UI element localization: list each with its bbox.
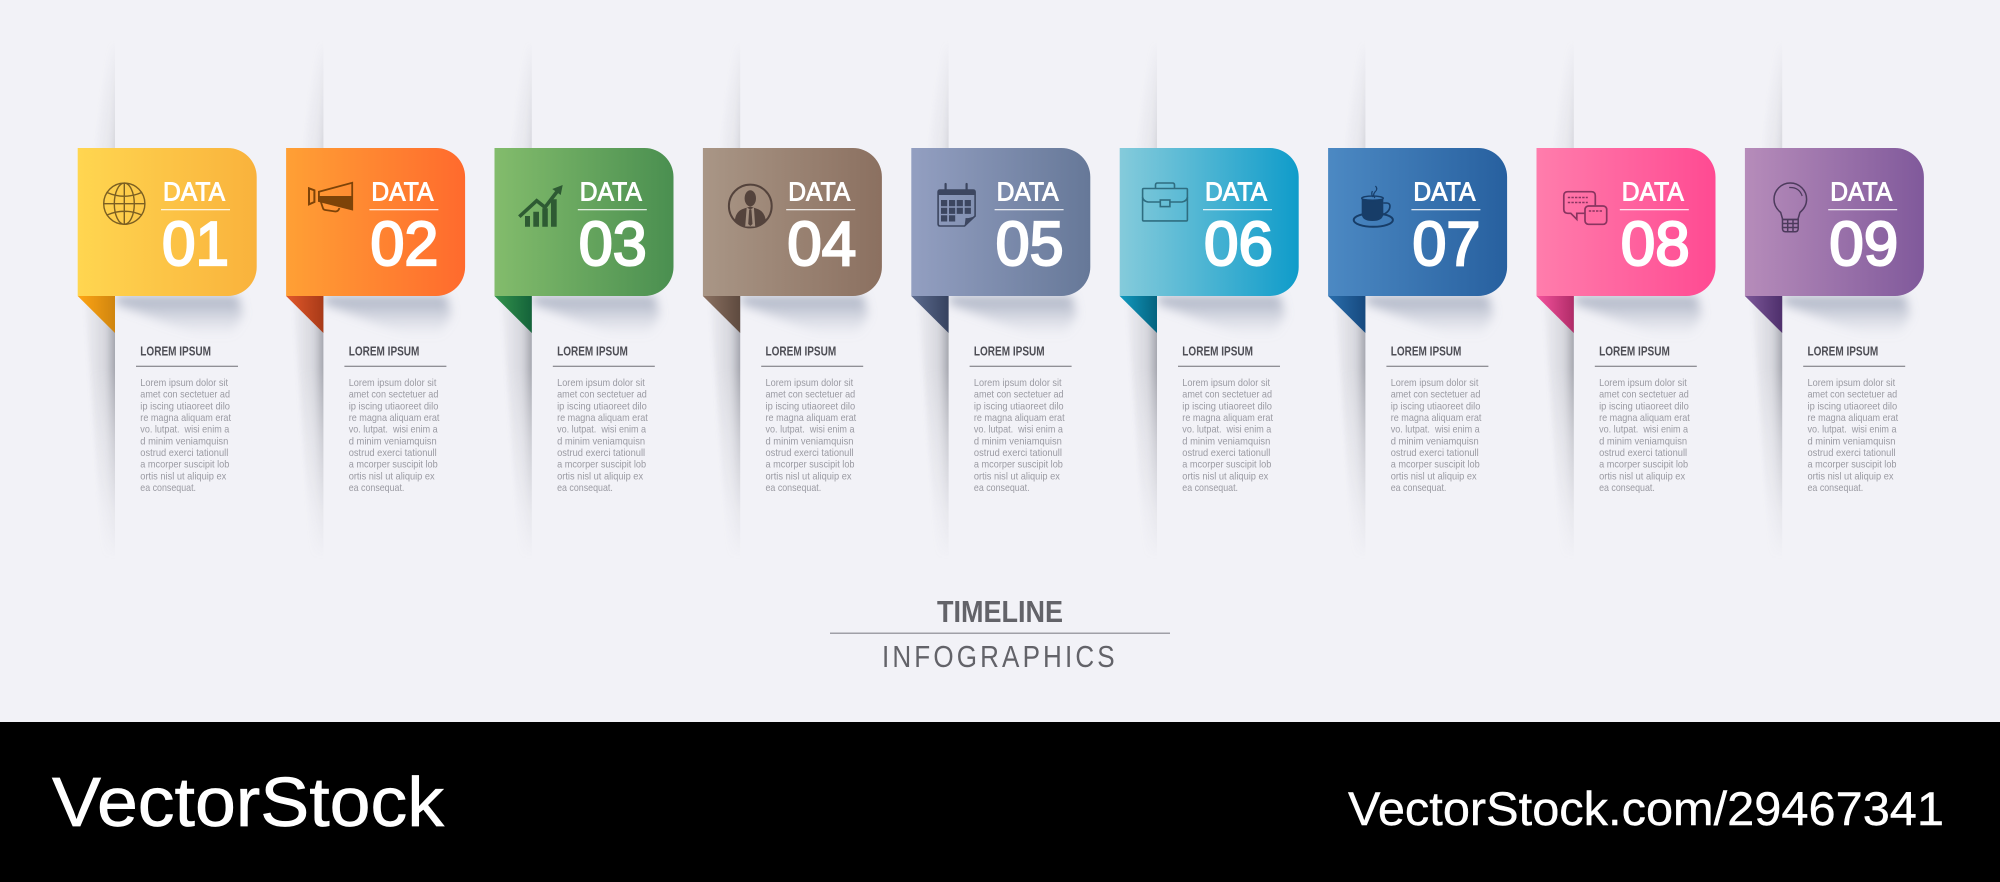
text block: re magna aliquam erat [1182, 412, 1273, 424]
text block: a mcorper suscipit lob [140, 459, 229, 471]
text block: ea consequat. [1807, 482, 1863, 494]
card [494, 148, 674, 296]
text block: LOREM IPSUM [1391, 345, 1461, 359]
label: DATA 09: DATA [1830, 177, 1893, 207]
card [1536, 148, 1716, 296]
label: DATA 02: 02 [370, 210, 438, 279]
label: DATA 05: 05 [996, 210, 1064, 279]
text block: ostrud exerci tationull [1599, 447, 1687, 459]
text block: d minim veniamquisn [1599, 435, 1687, 447]
text block: ortis nisl ut aliquip ex [1599, 470, 1686, 482]
text block: d minim veniamquisn [140, 435, 228, 447]
text block: ortis nisl ut aliquip ex [557, 470, 644, 482]
text block [1386, 345, 1488, 494]
label: DATA 07 [1411, 177, 1480, 279]
panel: step 07 [1328, 36, 1507, 570]
image URL: VectorStock.com/29467341 [1348, 782, 1944, 835]
text block: ostrud exerci tationull [766, 447, 854, 459]
text block: amet con sectetuer ad [1182, 389, 1272, 401]
label: DATA 06: 06 [1204, 210, 1273, 279]
label: DATA 09: 09 [1829, 210, 1898, 279]
text block: d minim veniamquisn [557, 435, 645, 447]
text block: re magna aliquam erat [766, 412, 856, 424]
text block: a mcorper suscipit lob [349, 459, 438, 471]
icon: coffee cup [1354, 186, 1393, 227]
text block: d minim veniamquisn [349, 435, 437, 447]
text block: LOREM IPSUM [1599, 345, 1670, 359]
text block: LOREM IPSUM [766, 345, 836, 359]
label: DATA 02 [369, 177, 438, 279]
brand name: VectorStock [52, 763, 445, 841]
text block: ea consequat. [557, 482, 613, 494]
text block: a mcorper suscipit lob [1182, 459, 1271, 471]
fold [911, 296, 949, 333]
text block: amet con sectetuer ad [974, 389, 1064, 401]
icon: briefcase [1143, 183, 1187, 221]
text block [970, 345, 1072, 494]
text block: re magna aliquam erat [1599, 412, 1690, 424]
text block: LOREM IPSUM [140, 345, 211, 359]
text block: ortis nisl ut aliquip ex [1182, 470, 1269, 482]
text block: vo. lutpat. wisi enim a [1182, 424, 1271, 436]
fold [1536, 296, 1574, 333]
text block: ea consequat. [1599, 482, 1655, 494]
text block: a mcorper suscipit lob [766, 459, 855, 471]
label: DATA 03: 03 [579, 210, 647, 279]
label: DATA 03 [578, 177, 647, 279]
icon: globe [104, 183, 145, 224]
text block: Lorem ipsum dolor sit [1807, 377, 1895, 389]
text block: vo. lutpat. wisi enim a [1391, 424, 1480, 436]
text block: vo. lutpat. wisi enim a [974, 424, 1063, 436]
text block: re magna aliquam erat [140, 412, 231, 424]
text block: ortis nisl ut aliquip ex [140, 470, 227, 482]
label: DATA 01: 01 [162, 210, 229, 279]
text block: amet con sectetuer ad [766, 389, 855, 401]
text block: amet con sectetuer ad [1391, 389, 1481, 401]
text block: Lorem ipsum dolor sit [349, 377, 436, 389]
fold [286, 296, 323, 333]
text block: vo. lutpat. wisi enim a [557, 424, 646, 436]
text block: ea consequat. [1391, 482, 1446, 494]
label: DATA 04: 04 [787, 210, 856, 279]
card [1745, 148, 1924, 296]
text block: re magna aliquam erat [557, 412, 648, 424]
panel: step 02 [286, 36, 465, 570]
text block: ip iscing utiaoreet dilo [557, 400, 647, 412]
text block: re magna aliquam erat [1391, 412, 1481, 424]
text block: amet con sectetuer ad [1807, 389, 1897, 401]
text block: a mcorper suscipit lob [974, 459, 1063, 471]
text block: d minim veniamquisn [766, 435, 854, 447]
text block: re magna aliquam erat [1807, 412, 1898, 424]
text block: Lorem ipsum dolor sit [140, 377, 228, 389]
text block: LOREM IPSUM [1807, 345, 1878, 359]
text block: vo. lutpat. wisi enim a [349, 424, 438, 436]
label: DATA 08: 08 [1621, 210, 1690, 279]
text block: ostrud exerci tationull [349, 447, 437, 459]
text block: vo. lutpat. wisi enim a [1807, 424, 1897, 436]
text block: ip iscing utiaoreet dilo [1182, 400, 1272, 412]
label: DATA 08: DATA [1622, 177, 1684, 207]
text block: Lorem ipsum dolor sit [557, 377, 645, 389]
fold [494, 296, 532, 333]
icon: megaphone [309, 183, 352, 212]
text block: vo. lutpat. wisi enim a [1599, 424, 1688, 436]
text block: ostrud exerci tationull [974, 447, 1062, 459]
text block: d minim veniamquisn [1807, 435, 1896, 447]
text block: a mcorper suscipit lob [1391, 459, 1480, 471]
fold [78, 296, 115, 333]
text block [553, 345, 655, 494]
text block: a mcorper suscipit lob [557, 459, 646, 471]
text block: ip iscing utiaoreet dilo [974, 400, 1064, 412]
text block: ip iscing utiaoreet dilo [1391, 400, 1481, 412]
text block: d minim veniamquisn [974, 435, 1062, 447]
text block: ip iscing utiaoreet dilo [766, 400, 855, 412]
text block [1595, 345, 1697, 494]
text block: LOREM IPSUM [1182, 345, 1253, 359]
icon: light bulb [1774, 183, 1807, 232]
label: DATA 06: DATA [1205, 177, 1268, 207]
icon: businessman [729, 185, 772, 227]
text block: ip iscing utiaoreet dilo [1807, 400, 1897, 412]
label: DATA 07: 07 [1412, 210, 1480, 279]
text block: ip iscing utiaoreet dilo [349, 400, 439, 412]
text block [761, 345, 863, 494]
text block: ostrud exerci tationull [1807, 447, 1895, 459]
text block: ea consequat. [1182, 482, 1238, 494]
panel: step 01 [78, 36, 257, 570]
text block: ortis nisl ut aliquip ex [349, 470, 435, 482]
label: DATA 08 [1620, 177, 1690, 279]
text block: ea consequat. [974, 482, 1030, 494]
label: DATA 04: DATA [788, 177, 851, 207]
panel: step 09 [1745, 36, 1924, 570]
text block [136, 345, 238, 494]
footer band [0, 722, 2000, 882]
text block: a mcorper suscipit lob [1807, 459, 1897, 471]
text block [1178, 345, 1280, 494]
text block: vo. lutpat. wisi enim a [766, 424, 855, 436]
text block: ea consequat. [349, 482, 404, 494]
panel: step 03 [494, 36, 674, 570]
text block: d minim veniamquisn [1391, 435, 1479, 447]
icon: chat bubbles [1564, 192, 1607, 224]
label: DATA 01 [161, 177, 230, 279]
label: DATA 09 [1828, 177, 1898, 279]
text block: ostrud exerci tationull [1182, 447, 1270, 459]
card [1120, 148, 1299, 296]
text block: amet con sectetuer ad [1599, 389, 1689, 401]
label: DATA 02: DATA [371, 177, 434, 207]
label: DATA 07: DATA [1413, 177, 1476, 207]
text block: ip iscing utiaoreet dilo [1599, 400, 1689, 412]
text block: ostrud exerci tationull [1391, 447, 1479, 459]
text block: ea consequat. [766, 482, 821, 494]
text block: LOREM IPSUM [557, 345, 628, 359]
card [911, 148, 1090, 296]
card [1328, 148, 1507, 296]
text block: Lorem ipsum dolor sit [1182, 377, 1270, 389]
text block [1803, 345, 1905, 494]
label: DATA 03: DATA [580, 177, 642, 207]
text block: ip iscing utiaoreet dilo [140, 400, 230, 412]
icon: growth chart [519, 185, 563, 227]
text block: ortis nisl ut aliquip ex [1807, 470, 1894, 482]
text block: amet con sectetuer ad [557, 389, 647, 401]
fold [1120, 296, 1157, 333]
panel: step 08 [1536, 36, 1716, 570]
text block: re magna aliquam erat [349, 412, 439, 424]
text block: LOREM IPSUM [974, 345, 1045, 359]
text block: ostrud exerci tationull [557, 447, 645, 459]
icon: calendar [938, 184, 975, 226]
text block: Lorem ipsum dolor sit [1599, 377, 1687, 389]
title: Timeline Infographics [830, 594, 1170, 675]
fold [1328, 296, 1365, 333]
text block: amet con sectetuer ad [349, 389, 439, 401]
text block: re magna aliquam erat [974, 412, 1065, 424]
text block: ostrud exerci tationull [140, 447, 228, 459]
label: DATA 04 [786, 177, 856, 279]
text block: Lorem ipsum dolor sit [766, 377, 853, 389]
label: DATA 05 [995, 177, 1064, 279]
text block [344, 345, 446, 494]
text block: a mcorper suscipit lob [1599, 459, 1688, 471]
text block: ea consequat. [140, 482, 196, 494]
title: Timeline Infographics: TIMELINE [937, 594, 1063, 629]
panel: step 04 [703, 36, 882, 570]
text block: d minim veniamquisn [1182, 435, 1270, 447]
card [286, 148, 465, 296]
title: Timeline Infographics: INFOGRAPHICS [882, 640, 1115, 675]
text block: ortis nisl ut aliquip ex [974, 470, 1061, 482]
text block: Lorem ipsum dolor sit [974, 377, 1062, 389]
label: DATA 06 [1203, 177, 1273, 279]
text block: LOREM IPSUM [349, 345, 419, 359]
text block: amet con sectetuer ad [140, 389, 230, 401]
text block: vo. lutpat. wisi enim a [140, 424, 229, 436]
card [703, 148, 882, 296]
label: DATA 01: DATA [163, 177, 226, 207]
text block: ortis nisl ut aliquip ex [766, 470, 852, 482]
label: DATA 05: DATA [997, 177, 1059, 207]
fold [703, 296, 740, 333]
card [78, 148, 257, 296]
text block: Lorem ipsum dolor sit [1391, 377, 1478, 389]
panel: step 05 [911, 36, 1090, 570]
panel: step 06 [1120, 36, 1299, 570]
text block: ortis nisl ut aliquip ex [1391, 470, 1477, 482]
fold [1745, 296, 1782, 333]
